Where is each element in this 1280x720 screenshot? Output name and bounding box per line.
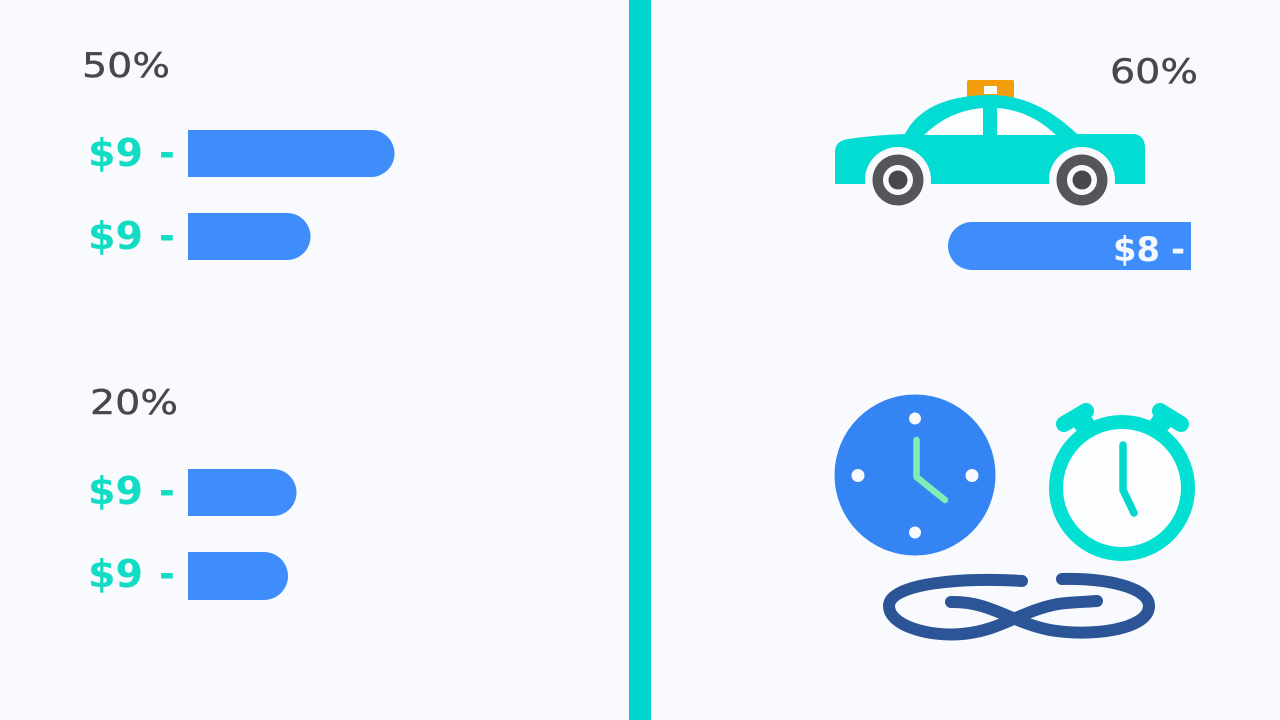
- bar: $8: $8: [1113, 230, 1160, 270]
- row: third $9 bar: -: [159, 469, 175, 513]
- row: second $9 bar: [88, 213, 310, 260]
- heading: 50%: 50%: [82, 46, 170, 86]
- row: first $9 bar: -: [159, 131, 175, 175]
- icon: blue clock: [834, 394, 996, 556]
- icon: alarm clock: [1056, 411, 1188, 554]
- panel: bottom left bars: [88, 383, 296, 600]
- row: first $9 bar: [88, 130, 394, 177]
- heading: 60%: 60%: [1110, 52, 1198, 92]
- panel: top left bars: [82, 46, 394, 260]
- icon: infinity link: [889, 579, 1149, 634]
- bar: $8: -: [1171, 230, 1185, 270]
- row: third $9 bar: [88, 469, 296, 516]
- center divider: [629, 0, 651, 720]
- row: fourth $9 bar: [88, 552, 288, 600]
- row: second $9 bar: -: [159, 214, 175, 258]
- icon: taxi: [835, 80, 1145, 213]
- row: first $9 bar: $9: [88, 131, 143, 175]
- row: second $9 bar: $9: [88, 214, 143, 258]
- row: third $9 bar: $9: [88, 469, 143, 513]
- row: fourth $9 bar: $9: [88, 552, 143, 596]
- panel: bottom right icons: [834, 394, 1188, 634]
- panel: top right taxi: [835, 52, 1198, 270]
- heading: 20%: 20%: [90, 383, 178, 423]
- bar: $8: [948, 222, 1191, 270]
- row: fourth $9 bar: -: [159, 552, 175, 596]
